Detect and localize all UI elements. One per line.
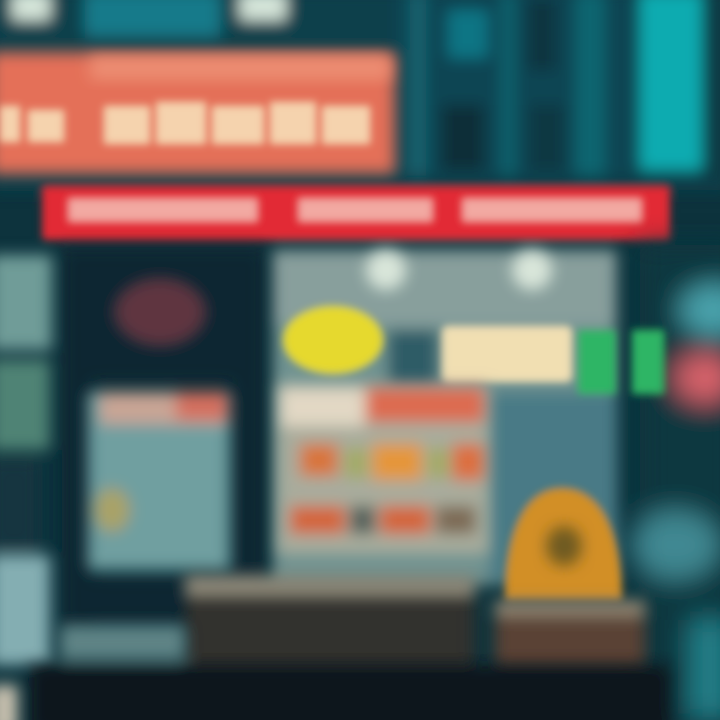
green sign: [578, 330, 664, 394]
upper orange sign: [0, 52, 395, 174]
left edge window: [0, 255, 52, 720]
shop interior: [272, 250, 618, 585]
counter: [185, 575, 645, 675]
left poster: [88, 392, 230, 570]
sign lettering: [0, 102, 370, 144]
ceiling lights: [366, 250, 552, 290]
building facade: [0, 0, 720, 190]
dark pillars and left window frame: [62, 248, 264, 628]
red banner: [42, 186, 670, 240]
foreground ledge: [30, 625, 670, 720]
orange furry figure: [505, 488, 622, 600]
red emblem: [114, 278, 206, 346]
product shelves: [278, 384, 488, 554]
cream sign: [442, 326, 572, 382]
yellow oval sign: [283, 306, 383, 374]
right side street: [630, 245, 720, 720]
